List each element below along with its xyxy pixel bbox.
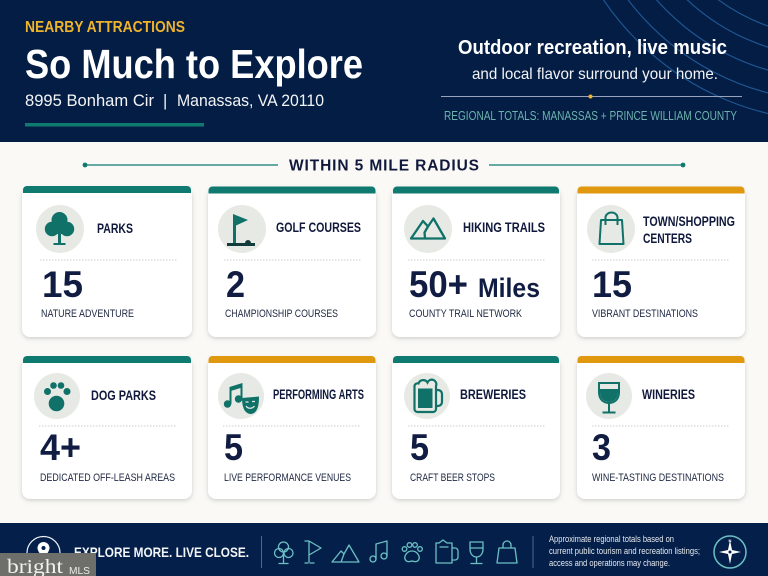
label: golf courses: GOLF COURSES [276,220,361,235]
label: town/shopping centers [643,214,735,246]
icon: paw outline [402,543,422,562]
number: 4+ dog parks: 4+ [40,427,81,468]
panel: wineries [577,356,745,499]
section heading: WITHIN 5 MILE RADIUS [289,158,479,174]
number: 15 parks: 15 [42,264,83,305]
icon: golf flag [218,205,266,253]
footer slogan: EXPLORE MORE. LIVE CLOSE. [74,544,249,560]
eyebrow: nearby attractions: NEARBY ATTRACTIONS [25,19,185,36]
watermark: bright MLS [0,553,96,576]
icon: mug outline [436,540,458,563]
label: wineries: WINERIES [642,387,695,402]
panel: golf courses [208,186,376,337]
icon: music note and mask [218,373,264,419]
tagline: and local flavor surround your home. [472,66,718,83]
teal accent bar [25,123,204,126]
icon: tree [36,205,84,253]
caption: county trail network: COUNTY TRAIL NETWORK [409,308,523,320]
address [25,92,324,110]
panel: parks [22,186,192,337]
address: | [163,92,167,110]
icon: wine glass outline [470,542,483,564]
icon: compass: N [729,538,732,543]
header band [0,0,768,142]
icon: music note outline [370,541,387,562]
number: 50+ miles: Miles [478,273,540,303]
address: 8995 Bonham Cir [25,92,154,110]
caption: vibrant destinations: VIBRANT DESTINATIONS [592,308,698,320]
title: So Much to Explore [25,41,363,87]
tagline: Outdoor recreation, live music [458,37,727,59]
icon: mountains [404,205,452,253]
label: town/shopping centers: CENTERS [643,231,692,246]
number: 2 golf courses: 2 [226,264,245,305]
icon: shopping bag [587,205,635,253]
panel: dog parks [22,356,192,499]
icon: beer mug [404,373,450,419]
number: 15 shopping centers: 15 [592,264,632,305]
label: parks: PARKS [97,221,133,236]
caption: craft beer stops: CRAFT BEER STOPS [410,472,495,484]
caption: off-leash areas: DEDICATED OFF-LEASH AREAS [40,472,175,484]
icon: flag outline [305,541,321,563]
icon: wine glass [586,373,632,419]
footer band [0,523,768,576]
icon: paw print [34,373,80,419]
label: performing arts: PERFORMING ARTS [273,387,364,402]
caption: live performance venues: LIVE PERFORMANCE VENUES [224,472,351,484]
panel: breweries [392,356,560,499]
panel: performing arts [208,356,376,499]
panel: town and shopping centers [577,186,745,337]
label: breweries: BREWERIES [460,387,526,402]
icon: compass [714,536,746,568]
label: hiking trails: HIKING TRAILS [463,220,545,235]
address: Manassas, VA 20110 [177,92,324,110]
number: 3 wineries: 3 [592,427,611,468]
number: 5 breweries: 5 [410,427,429,468]
footer icon row [274,540,517,564]
icon: bag outline [497,541,517,563]
footer disclaimer: access and operations may change. [549,558,670,569]
number: 5 venues: 5 [224,427,243,468]
footer disclaimer: Approximate regional totals based on [549,534,674,545]
icon: tree outline [274,542,293,564]
number: 50+ miles: 50+ [409,264,468,305]
footer disclaimer [549,534,700,569]
panel: hiking trails [392,186,560,337]
footer disclaimer: current public tourism and recreation listings; [549,546,700,557]
section heading [83,158,685,174]
tagline [458,37,727,83]
caption: wine-tasting destinations: WINE-TASTING DESTINATIONS [592,472,724,484]
icon: map pin [27,536,60,570]
caption: nature adventure: NATURE ADVENTURE [41,308,134,320]
label: town/shopping centers: TOWN/SHOPPING [643,214,735,229]
icon: mountains outline [332,545,359,562]
tagline divider [441,94,742,98]
caption: championship courses: CHAMPIONSHIP COURSES [225,308,338,320]
label: dog parks: DOG PARKS [91,388,156,403]
